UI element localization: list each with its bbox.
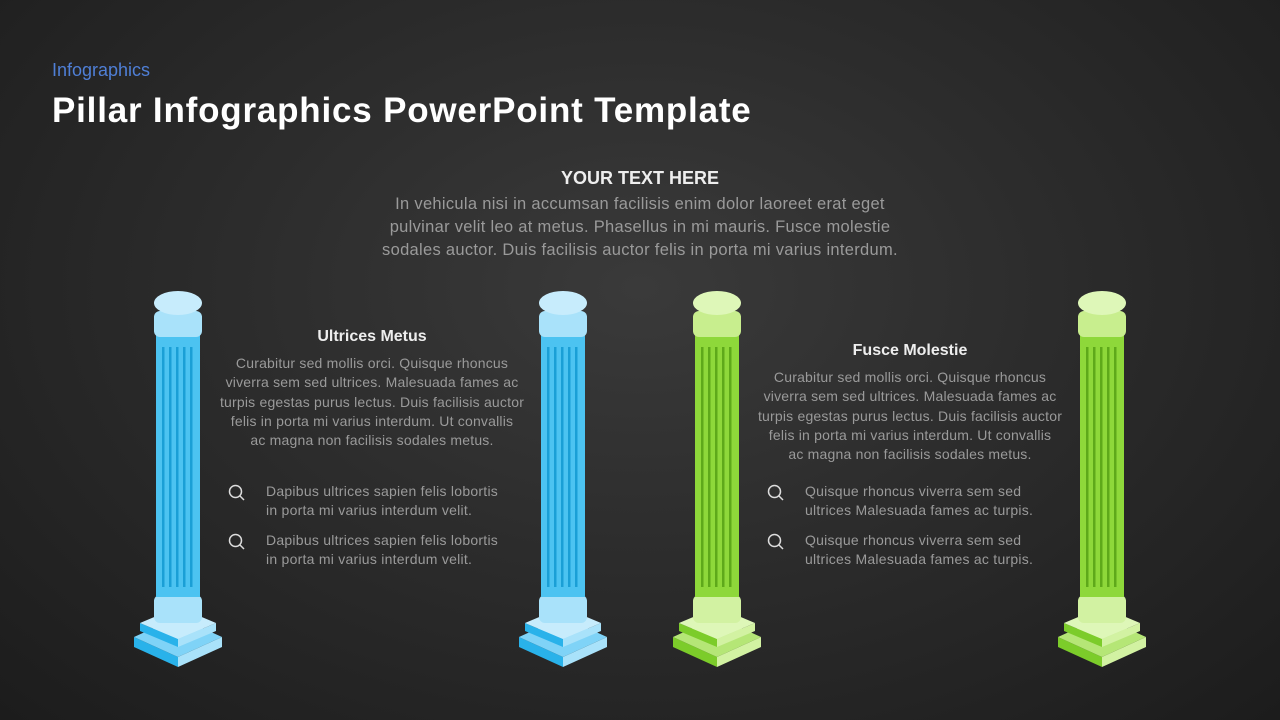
paragraph [758, 369, 1062, 462]
heading: Fusce Molestie [853, 342, 967, 359]
pillar 3 green [673, 291, 761, 667]
paragraph [220, 355, 524, 448]
top text block: sodales auctor. Duis facilisis auctor felis in porta mi varius interdum. [382, 241, 898, 259]
paragraph: felis in porta mi varius interdum. Ut convallis [231, 413, 513, 429]
bullet 2 right [768, 532, 1033, 567]
bullet 2 left [228, 532, 498, 567]
paragraph: viverra sem sed ultrices. Malesuada fames ac [764, 388, 1056, 404]
bullet 1 left: in porta mi varius interdum velit. [266, 502, 472, 518]
bullet 1 left: Dapibus ultrices sapien felis lobortis [266, 483, 498, 499]
pillar 4 green [1058, 291, 1146, 667]
bullet 1 right: Quisque rhoncus viverra sem sed [805, 483, 1021, 499]
bullet 1 right [768, 483, 1033, 518]
pillar 1 blue [134, 291, 222, 667]
panel: Fusce Molestie [758, 342, 1062, 462]
paragraph: felis in porta mi varius interdum. Ut convallis [769, 427, 1051, 443]
paragraph: Curabitur sed mollis orci. Quisque rhoncus [774, 369, 1046, 385]
paragraph: ac magna non facilisis sodales metus. [788, 446, 1032, 462]
bullet 2 left: Dapibus ultrices sapien felis lobortis [266, 532, 498, 548]
panel: Ultrices Metus [220, 328, 524, 448]
paragraph: Curabitur sed mollis orci. Quisque rhoncus [236, 355, 508, 371]
paragraph: ac magna non facilisis sodales metus. [250, 432, 494, 448]
title: Pillar Infographics PowerPoint Template [52, 91, 752, 130]
paragraph: turpis egestas purus lectus. Duis facilisis auctor [220, 394, 524, 410]
subtitle: Infographics [52, 60, 150, 80]
paragraph: turpis egestas purus lectus. Duis facilisis auctor [758, 408, 1062, 424]
heading: Ultrices Metus [317, 328, 427, 345]
paragraph: viverra sem sed ultrices. Malesuada fames ac [226, 374, 518, 390]
bullet 1 right: ultrices Malesuada fames ac turpis. [805, 502, 1033, 518]
pillar 2 blue [519, 291, 607, 667]
bullet 2 left: in porta mi varius interdum velit. [266, 551, 472, 567]
top text block: In vehicula nisi in accumsan facilisis enim dolor laoreet erat eget [395, 195, 885, 213]
top text block [382, 168, 898, 259]
bullet 2 right: ultrices Malesuada fames ac turpis. [805, 551, 1033, 567]
top text block: pulvinar velit leo at metus. Phasellus in mi mauris. Fusce molestie [390, 218, 890, 236]
bullet 2 right: Quisque rhoncus viverra sem sed [805, 532, 1021, 548]
top text block: YOUR TEXT HERE [561, 168, 719, 188]
bullet 1 left [228, 483, 498, 518]
